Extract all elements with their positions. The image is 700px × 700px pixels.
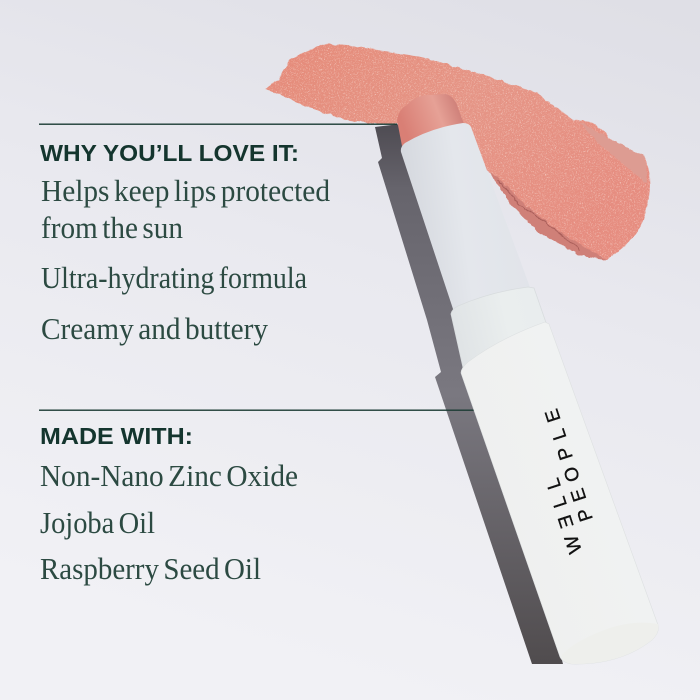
benefit: sun protection: Helps keep lips protected <box>41 173 330 208</box>
benefit: hydrating: Ultra-hydrating formula <box>41 260 307 295</box>
ingredient: raspberry seed oil: Raspberry Seed Oil <box>40 551 261 586</box>
lower tube <box>461 322 658 664</box>
benefit: creamy: Creamy and buttery <box>41 311 268 346</box>
balm bullet <box>397 94 464 146</box>
benefit: sun protection <box>41 173 330 245</box>
section rule: made with <box>39 410 474 411</box>
section rule: why you'll love it <box>39 124 397 125</box>
tube end cap <box>561 623 658 664</box>
makeup swatch <box>265 44 650 260</box>
ingredient: zinc oxide: Non-Nano Zinc Oxide <box>40 458 298 493</box>
panel: made with <box>40 423 298 586</box>
logo: well people: PEOPLE <box>542 406 598 524</box>
ingredient: jojoba oil: Jojoba Oil <box>40 505 155 540</box>
benefit: sun protection: from the sun <box>41 210 183 245</box>
stick cast shadow <box>375 124 563 664</box>
collar <box>451 287 552 372</box>
logo: well people: WƎLL <box>543 475 587 556</box>
upper tube <box>401 123 531 318</box>
heading: MADE WITH: <box>40 423 193 449</box>
lipstick product <box>397 94 658 664</box>
panel: why you'll love it <box>40 140 330 346</box>
heading: WHY YOU’LL LOVE IT: <box>40 140 299 166</box>
